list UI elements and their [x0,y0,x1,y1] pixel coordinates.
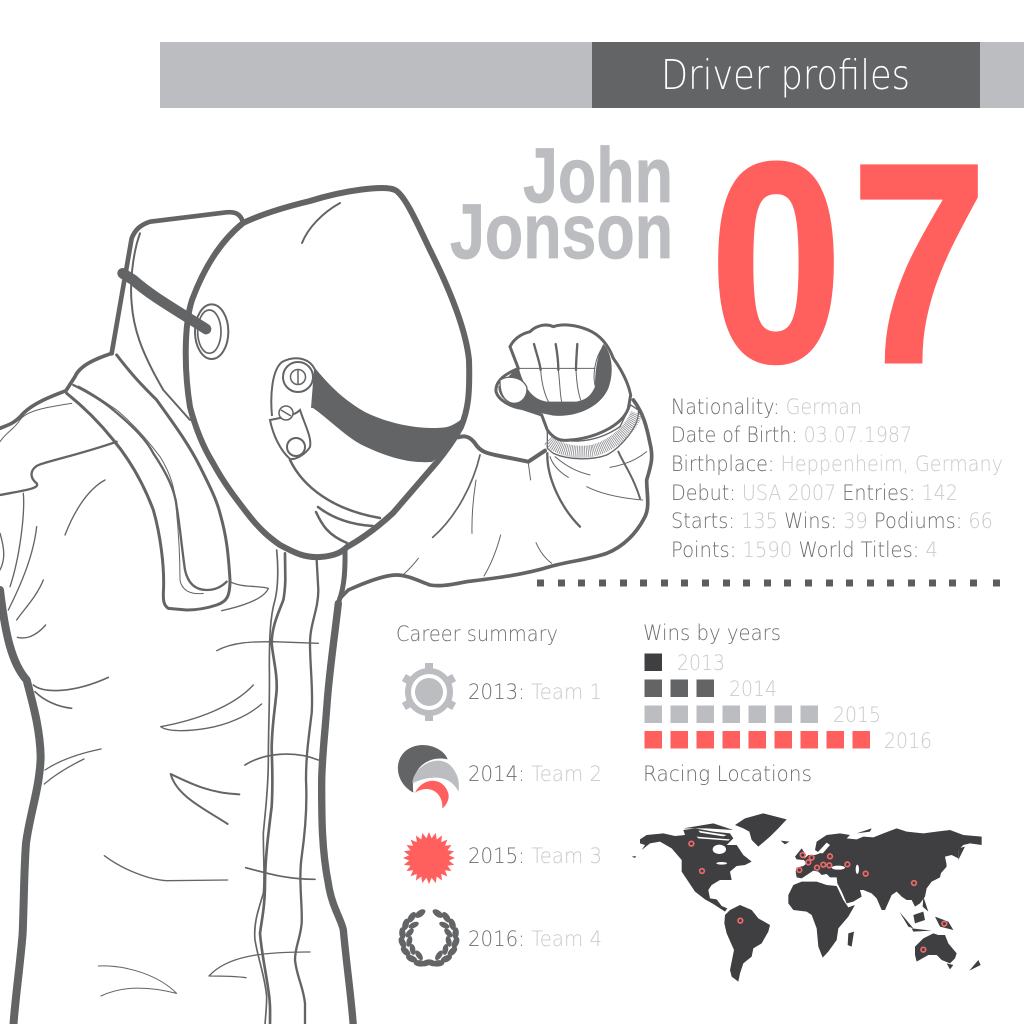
continents [632,813,982,982]
driver facts [671,395,1003,563]
helmet outline [186,188,469,557]
team 4: 2016: Team 4 [468,927,602,951]
career heading: Career summary [396,622,558,646]
helmet rear guard and shoulders [0,212,268,620]
cuff [547,405,638,459]
driver number: 7 [851,105,987,423]
icon: crescents [398,745,459,808]
title: Driver profiles [661,51,910,99]
2013 wins [644,651,725,675]
2014 wins [644,677,777,701]
helmet visor band [313,368,463,462]
arm and sleeve [340,325,652,598]
icon: laurel wreath [397,908,461,968]
2013 wins: 2013 [677,651,725,675]
2016 wins: 2016 [884,729,932,753]
driver facts: Starts: 135 Wins: 39 Podiums: 66 [671,509,993,534]
driver facts: Nationality: German [671,395,862,420]
inland seas [697,831,859,874]
driver number: 0 [710,103,842,422]
driver name [450,131,673,275]
career summary [396,622,602,968]
visor hinge [270,358,315,459]
driver name: Jonson [450,187,673,275]
torso [0,550,353,1024]
chin curves [290,460,380,543]
ear rings and strap [123,273,228,359]
divider dots [537,580,1000,586]
driver facts: Points: 1590 World Titles: 4 [671,538,938,563]
wins heading: Wins by years [643,621,781,645]
icon: gear [402,663,456,721]
2014 wins: 2014 [729,677,777,701]
driver illustration [0,188,652,1024]
team 2: 2014: Team 2 [468,762,602,786]
icon: sunburst [403,832,455,884]
fist [496,325,631,440]
driver number [710,103,987,423]
team 3: 2015: Team 3 [468,844,602,868]
driver name: John [523,131,673,219]
header bar [160,42,1024,108]
2015 wins [644,703,881,727]
location markers [689,841,947,952]
fist grip shadow [498,344,612,416]
driver facts: Birthplace: Heppenheim, Germany [671,452,1003,477]
driver facts: Date of Birth: 03.07.1987 [671,423,912,448]
team 1: 2013: Team 1 [468,680,602,704]
2016 wins [644,729,932,753]
2015 wins: 2015 [833,703,881,727]
wins by years chart [643,621,932,753]
driver facts: Debut: USA 2007 Entries: 142 [671,481,958,506]
racing locations heading: Racing Locations [643,762,812,786]
world map [632,813,982,982]
